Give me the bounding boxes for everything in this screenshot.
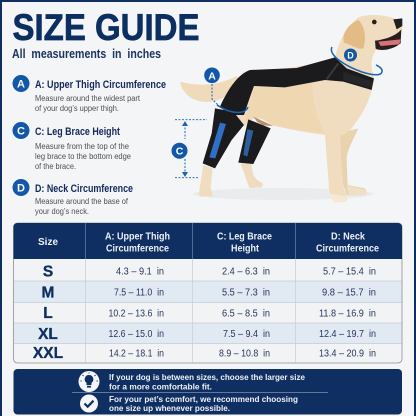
table header: Size (38, 236, 58, 248)
instruction C: leg brace to the bottom edge (35, 152, 132, 161)
table values: 2.4 – 6.3 in (222, 266, 270, 278)
table header (14, 223, 402, 259)
instruction D (12, 179, 133, 216)
table values: 10.2 – 13.6 in (108, 309, 164, 320)
instruction C: C: Leg Brace Height (35, 126, 120, 138)
nose and mouth (393, 18, 402, 29)
size table (14, 223, 402, 363)
icon: check mark (80, 394, 98, 412)
size labels: M (42, 284, 54, 302)
table values: 7.5 – 11.0 in (114, 288, 164, 299)
marker A on dog (204, 68, 248, 112)
instruction C (12, 122, 132, 171)
size labels: XL (38, 326, 58, 343)
instruction D: D (17, 182, 25, 194)
table values: 5.7 – 15.4 in (323, 266, 376, 278)
tip text 2: one size up whenever possible. (109, 404, 230, 413)
panel: measurement instructions (12, 75, 166, 216)
body shading (244, 80, 325, 133)
tip text 2: For your pet’s comfort, we recommend choosing (109, 395, 298, 404)
far legs (338, 128, 367, 196)
tip text 1 (109, 373, 305, 392)
size labels: L (43, 305, 53, 322)
table header: Circumference (316, 242, 379, 254)
table values: 6.5 – 8.5 in (222, 309, 270, 320)
table header: C: Leg Brace (217, 230, 272, 242)
instruction D: Measure around the base of (35, 197, 129, 206)
table header: A: Upper Thigh (105, 230, 170, 242)
size labels: XXL (33, 345, 63, 362)
tip text 1: If your dog is between sizes, choose the larger size (109, 373, 305, 382)
table values (108, 266, 376, 360)
instruction A: A: Upper Thigh Circumference (35, 79, 166, 91)
tips panel (14, 369, 402, 414)
rear leg near (199, 165, 213, 197)
marker D on dog: D (347, 50, 354, 60)
table values: 4.3 – 9.1 in (116, 266, 164, 278)
dog illustration (180, 15, 402, 203)
table values: 14.2 – 18.1 in (109, 348, 164, 360)
marker D on dog (331, 47, 382, 75)
belly shade (253, 117, 273, 126)
table body (14, 223, 402, 363)
table values: 12.6 – 15.0 in (108, 329, 164, 340)
table values: 9.8 – 15.7 in (322, 288, 376, 299)
table values: 13.4 – 20.9 in (319, 348, 376, 360)
instruction A: of your dog’s upper thigh. (35, 104, 119, 113)
tip text 1: for a more comfortable fit. (109, 382, 212, 392)
table values: 12.4 – 19.7 in (319, 329, 376, 340)
size labels: S (43, 264, 53, 280)
table header: D: Neck (331, 230, 365, 242)
tail (180, 76, 237, 102)
table values: 11.8 – 16.9 in (319, 309, 376, 320)
subtitle: All measurements in inches (12, 47, 161, 61)
instruction D: D: Neck Circumference (35, 183, 133, 195)
brace harness (220, 57, 374, 115)
leg brace near (203, 108, 244, 168)
instruction C: Measure from the top of the (35, 142, 130, 151)
instruction D: your dog’s neck. (35, 207, 89, 216)
table values: 5.5 – 7.3 in (222, 288, 270, 299)
marker A on dog: A (208, 70, 216, 82)
leg brace far (238, 119, 271, 164)
instruction C: C (17, 126, 25, 138)
table header: Height (231, 242, 259, 254)
instruction A: Measure around the widest part (35, 94, 141, 103)
body (220, 15, 402, 203)
size labels (33, 264, 63, 362)
table values: 8.9 – 10.8 in (219, 348, 270, 360)
front paw (330, 193, 347, 203)
table header: Circumference (106, 242, 169, 254)
instruction A (12, 75, 166, 113)
marker C height arrow: C (176, 146, 184, 158)
marker C height arrow (172, 120, 207, 178)
instruction C: of the brace. (35, 162, 76, 171)
icon: light bulb (78, 371, 100, 392)
instruction A: A (17, 78, 25, 90)
table values: 7.5 – 9.4 in (223, 329, 270, 340)
ear (343, 20, 365, 49)
tip text 2 (109, 395, 298, 413)
title: SIZE GUIDE (12, 7, 200, 48)
